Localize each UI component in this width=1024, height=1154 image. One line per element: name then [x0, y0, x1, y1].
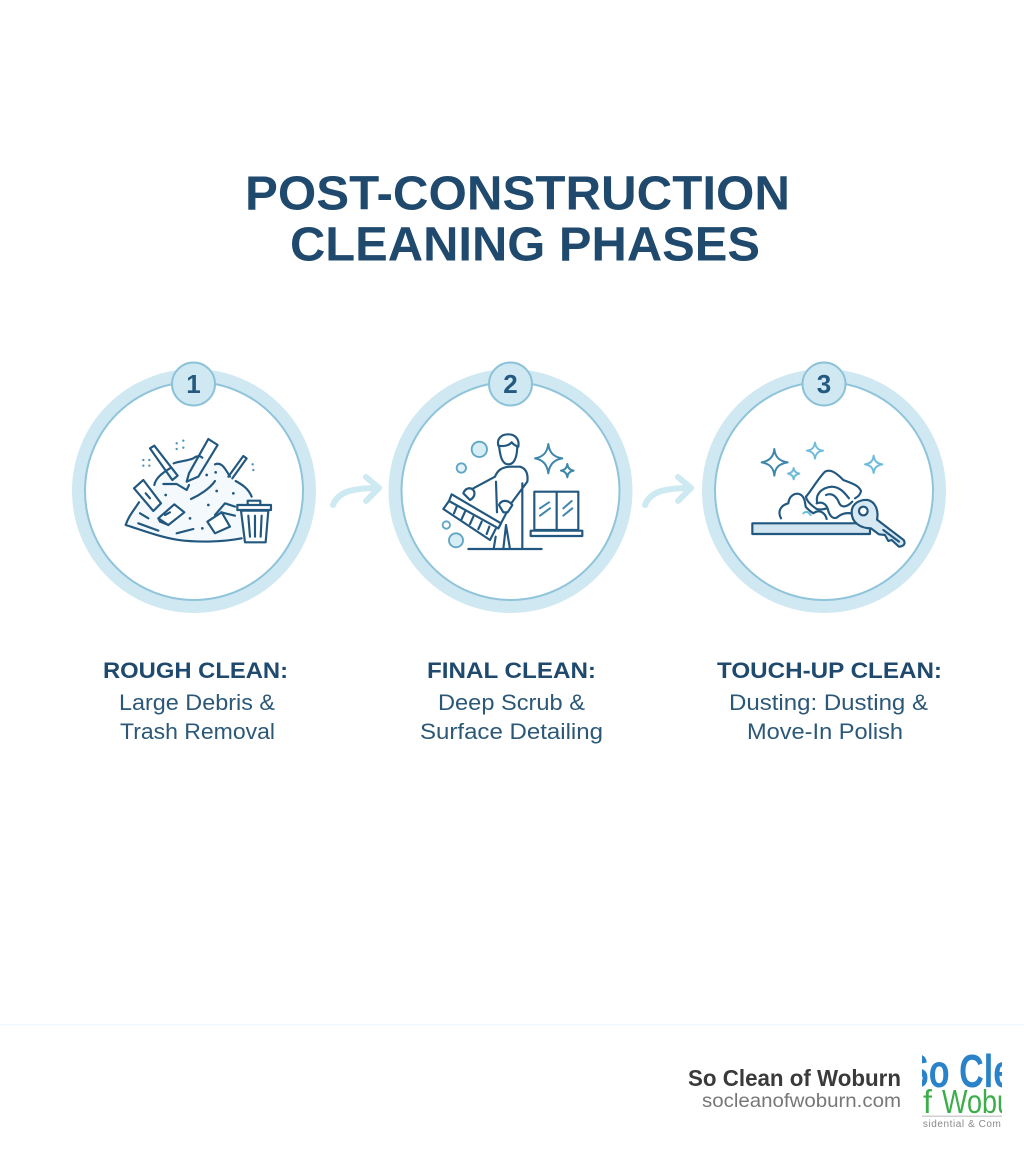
panel: phase 1 rough clean — [78, 362, 310, 606]
label: phase 3: Dusting: Dusting & — [729, 690, 928, 715]
badge 1 — [172, 362, 215, 406]
footer brand text: socleanofwoburn.com — [702, 1090, 901, 1112]
ring 3 — [708, 376, 940, 606]
icon: person scrubbing with brush beside window — [443, 434, 582, 549]
badge 3 — [802, 362, 846, 406]
label: phase 2: Surface Detailing — [420, 719, 603, 744]
icon: debris pile and trash can — [126, 439, 271, 542]
cropped company logo — [922, 1054, 1002, 1127]
label: phase 2: FINAL CLEAN: — [427, 658, 596, 683]
arrow 2 to 3 — [645, 477, 691, 505]
ring 2 — [395, 376, 626, 606]
cropped company logo: of — [905, 1083, 933, 1120]
label: phase 1: Trash Removal — [120, 719, 275, 744]
label: phase 2: Deep Scrub & — [438, 690, 585, 715]
label: phase 1: Large Debris & — [119, 690, 275, 715]
label: phase 3: TOUCH-UP CLEAN: — [717, 658, 942, 683]
title: POST-CONSTRUCTION — [245, 168, 790, 220]
label: phase 3 — [717, 658, 942, 744]
title — [245, 168, 790, 272]
badge 1: 1 — [186, 369, 201, 399]
title: CLEANING PHASES — [290, 218, 760, 272]
footer brand text — [688, 1065, 901, 1112]
badge 2: 2 — [503, 369, 518, 399]
label: phase 2 — [420, 658, 603, 744]
ring 1 — [78, 376, 310, 606]
panel: phase 2 final clean — [395, 362, 626, 606]
label: phase 1: ROUGH CLEAN: — [103, 658, 288, 683]
footer — [0, 1024, 1024, 1127]
badge 2 — [489, 362, 532, 406]
footer brand text: So Clean of Woburn — [688, 1065, 901, 1091]
icon: polished ledge, cloth, sparkles and key — [752, 443, 905, 547]
badge 3: 3 — [817, 369, 831, 399]
panel: phase 3 touch-up clean — [708, 362, 940, 606]
label: phase 3: Move-In Polish — [747, 719, 903, 744]
label: phase 1 — [103, 658, 288, 744]
arrow 1 to 2 — [333, 477, 379, 505]
